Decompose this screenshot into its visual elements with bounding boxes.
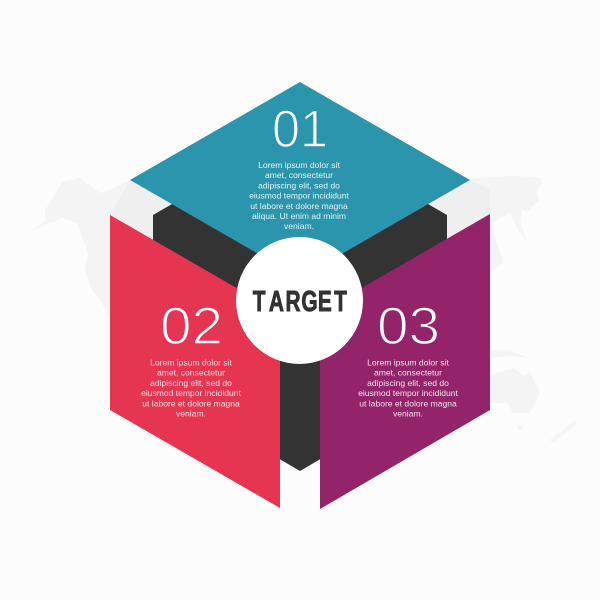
- text block 02: adipiscing elit, sed do: [150, 378, 232, 388]
- text block 02: eiusmod tempor incididunt: [141, 388, 242, 398]
- text block 03: adipiscing elit, sed do: [367, 378, 449, 388]
- title: TARGET: TARGET: [253, 286, 347, 318]
- dark hexagon backing: [153, 204, 447, 471]
- text block 02: veniam.: [176, 408, 206, 418]
- text block 02: ut labore et dolore magna: [142, 398, 240, 408]
- text block 02: amet, consectetur: [157, 368, 225, 378]
- text block 01: aliqua. Ut enim ad minim: [252, 211, 346, 221]
- text block 03: veniam.: [393, 408, 423, 418]
- number 02: 02: [160, 297, 223, 356]
- text block 01: adipiscing elit, sed do: [258, 180, 340, 190]
- text block 01: veniam.: [284, 221, 314, 231]
- panel 01: teal: [130, 82, 470, 278]
- panel 03: purple: [320, 214, 490, 509]
- number 03: 03: [377, 297, 440, 356]
- text block 03: amet, consectetur: [374, 368, 442, 378]
- number 01: 01: [272, 100, 328, 159]
- text block 03: Lorem ipsum dolor sit: [367, 358, 449, 368]
- text block 01: ut labore et dolore magna: [250, 201, 348, 211]
- text block 03: eiusmod tempor incididunt: [358, 388, 459, 398]
- text block 02: Lorem ipsum dolor sit: [150, 358, 232, 368]
- text block 03: ut labore et dolore magna: [359, 398, 457, 408]
- text block 01: amet, consectetur: [265, 170, 333, 180]
- center circle: [236, 237, 363, 364]
- text block 01: eiusmod tempor incididunt: [249, 191, 350, 201]
- panel 02: red: [110, 215, 280, 508]
- world map: [30, 176, 577, 443]
- text block 01: Lorem ipsum dolor sit: [258, 160, 340, 170]
